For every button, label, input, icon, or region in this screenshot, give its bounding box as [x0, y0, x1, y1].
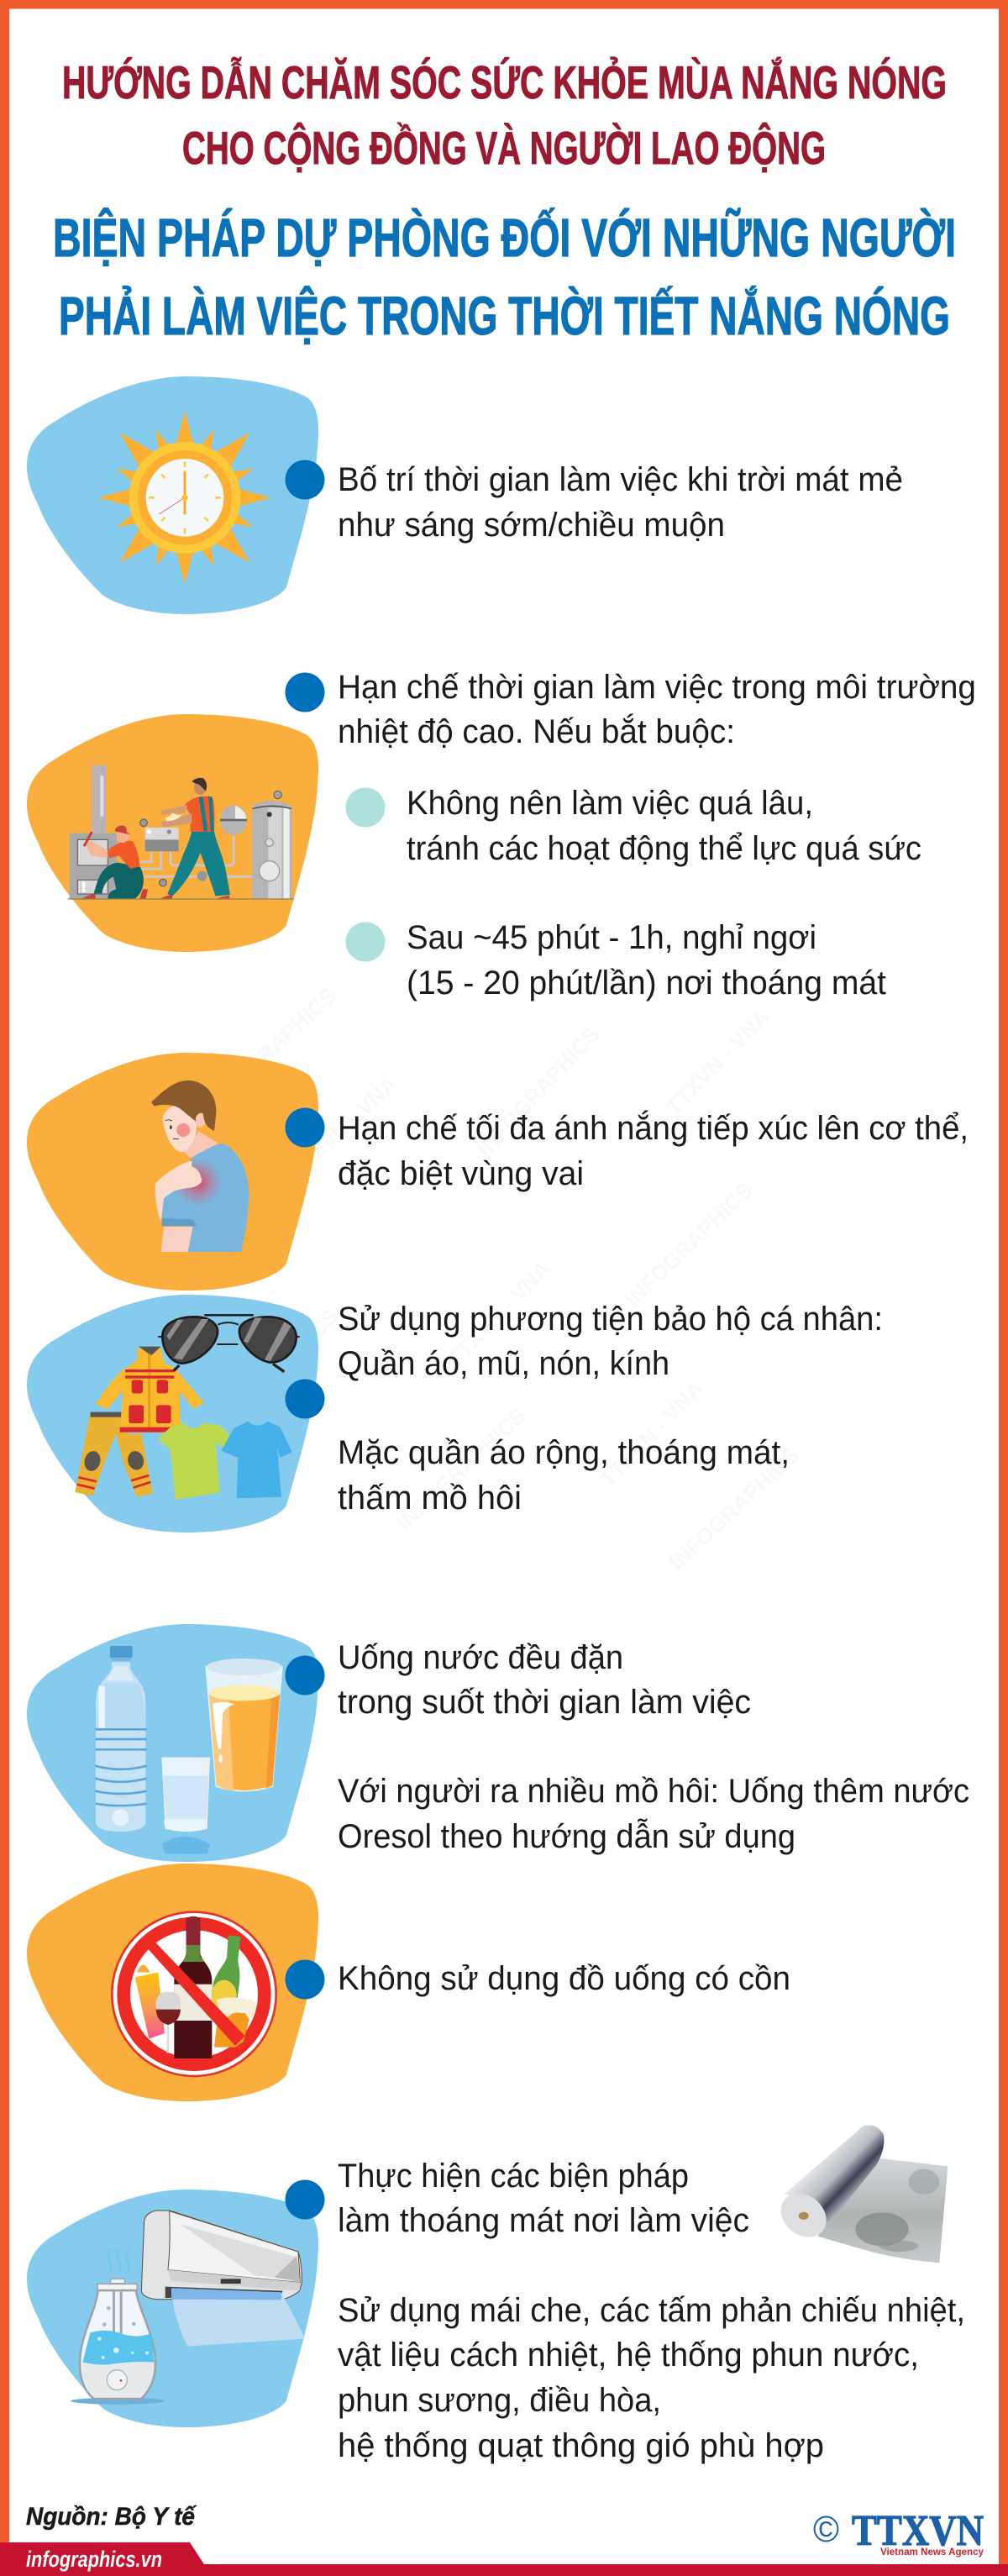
bullet: [286, 672, 324, 712]
panel: limit sun exposure: [27, 1053, 969, 1291]
subtitle: blue heading: [53, 207, 956, 346]
panel: protective equipment: [27, 1295, 883, 1532]
text block: phun sương, điều hòa,: [338, 2382, 661, 2419]
icon: no alcohol sign: [111, 1911, 277, 2077]
text block: [338, 1109, 969, 1192]
panel: drink water: [27, 1624, 969, 1862]
blob background: [27, 376, 318, 614]
blob background: [27, 1864, 318, 2101]
infographic canvas: INFOGRAPHICS: [391, 1402, 531, 1535]
text block: đặc biệt vùng vai: [338, 1155, 584, 1192]
text block: làm thoáng mát nơi làm việc: [338, 2202, 749, 2239]
text block: Thực hiện các biện pháp: [338, 2158, 689, 2195]
blob background: [27, 1295, 318, 1532]
text block: nhiệt độ cao. Nếu bắt buộc:: [338, 712, 735, 750]
text block: Oresol theo hướng dẫn sử dụng: [338, 1817, 795, 1855]
text block: Quần áo, mũ, nón, kính: [338, 1345, 669, 1382]
infographic canvas: INFOGRAPHICS: [208, 1304, 344, 1442]
sub-item 2 text: (15 - 20 phút/lần) nơi thoáng mát: [407, 965, 886, 1001]
infographic canvas: TTXVN - VNA: [285, 1071, 402, 1183]
blob background: [27, 2190, 318, 2427]
infographic canvas: TTXVN - VNA: [661, 1003, 774, 1120]
bullet: [286, 1380, 324, 1418]
agency name: Vietnam News Agency: [880, 2546, 984, 2558]
sub-item 1 text: tránh các hoạt động thể lực quá sức: [407, 830, 921, 867]
sub-item 2 text: Sau ~45 phút - 1h, nghỉ ngơi: [407, 919, 816, 956]
blob background: [27, 714, 318, 952]
text block: [338, 2158, 965, 2464]
text block: vật liệu cách nhiệt, hệ thống phun nước,: [338, 2337, 919, 2374]
bullet: [286, 1959, 324, 2000]
infographic canvas: TTXVN - VNA: [595, 1375, 708, 1492]
text block: Bố trí thời gian làm việc khi trời mát mẻ: [338, 461, 903, 498]
text block: Hạn chế thời gian làm việc trong môi trường: [338, 669, 976, 706]
bullet: [286, 1107, 324, 1148]
panel: limit high temperature work: [27, 669, 976, 1001]
sub-bullet 2: [346, 923, 385, 961]
panel: workplace cooling: [27, 2125, 965, 2464]
panel: no alcohol: [27, 1864, 790, 2101]
icon: reflective insulation roll: [772, 2125, 948, 2263]
icon: humidifier: [71, 2249, 165, 2405]
text block: [338, 1301, 883, 1517]
bullet: [286, 2179, 324, 2220]
infographic canvas: TTXVN - VNA: [442, 1255, 555, 1372]
infographic canvas: INFOGRAPHICS: [620, 1177, 758, 1312]
text block: trong suốt thời gian làm việc: [338, 1684, 751, 1721]
bullet: [286, 1655, 324, 1695]
website: infographics.vn: [26, 2547, 162, 2572]
bullet: [286, 460, 324, 499]
panel: work in cool hours: [27, 376, 903, 614]
copyright mark: ©: [813, 2509, 839, 2550]
text block: Không sử dụng đồ uống có cồn: [338, 1960, 790, 1997]
text block: như sáng sớm/chiều muộn: [338, 507, 725, 544]
icon: air conditioner: [141, 2211, 305, 2347]
text block: Hạn chế tối đa ánh nắng tiếp xúc lên cơ thể,: [338, 1109, 969, 1147]
icon: water bottle and glasses: [95, 1646, 283, 1854]
sub-item 1 text: [407, 785, 921, 867]
source credit: Nguồn: Bộ Y tế: [26, 2503, 197, 2531]
text block: Sử dụng mái che, các tấm phản chiếu nhiệt,: [338, 2292, 965, 2329]
blob background: [27, 1624, 318, 1862]
icon: workers at boiler: [68, 765, 294, 900]
infographic canvas: INFOGRAPHICS: [471, 1022, 604, 1161]
text block: Với người ra nhiều mồ hôi: Uống thêm nước: [338, 1773, 969, 1810]
title: red heading: [62, 56, 947, 174]
sub-item 1 text: Không nên làm việc quá lâu,: [407, 785, 813, 822]
text block: thấm mồ hôi: [338, 1480, 522, 1517]
text block: Sử dụng phương tiện bảo hộ cá nhân:: [338, 1301, 883, 1338]
sub-bullet 1: [346, 788, 385, 827]
icon: protective clothing and sunglasses: [75, 1314, 300, 1500]
text block: hệ thống quạt thông gió phù hợp: [338, 2427, 824, 2464]
text block: Mặc quần áo rộng, thoáng mát,: [338, 1434, 790, 1471]
infographic canvas: INFOGRAPHICS: [664, 1442, 804, 1575]
infographic canvas: INFOGRAPHICS: [202, 982, 341, 1115]
text block: [338, 669, 976, 750]
text block: [338, 1639, 969, 1855]
wordmark: TTXVN: [852, 2507, 984, 2555]
icon: sun clock: [98, 411, 271, 584]
red footer ribbon: [0, 2542, 1008, 2576]
sub-item 2 text: [407, 919, 886, 1001]
logo: TTXVN: [813, 2507, 984, 2558]
footer bar: [0, 2542, 1008, 2576]
blob background: [27, 1053, 318, 1291]
text block: [338, 461, 903, 544]
icon: man with sore shoulder: [151, 1080, 249, 1252]
text block: Uống nước đều đặn: [338, 1639, 623, 1676]
